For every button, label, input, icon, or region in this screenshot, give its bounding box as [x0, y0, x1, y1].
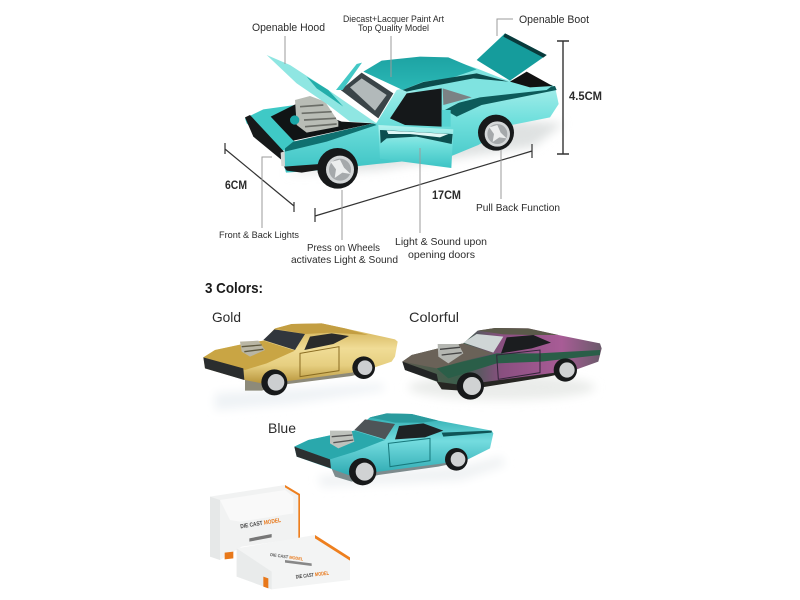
- dark stripe: [442, 431, 492, 437]
- side window: [390, 88, 442, 127]
- green stripe: [437, 350, 600, 378]
- front hood deck: [245, 105, 295, 152]
- hood: [294, 431, 385, 459]
- packaging boxes: [210, 485, 350, 589]
- label: Pull Back Function: Pull Back Function: [476, 202, 560, 214]
- blue car: [294, 413, 505, 487]
- side window: [304, 333, 349, 350]
- label: Press on Wheels: activates Light & Sound: [291, 254, 398, 266]
- door outline: [388, 438, 430, 467]
- side window: [501, 335, 551, 353]
- engine block: [290, 96, 338, 133]
- box side title: DIE CAST MODEL: [270, 552, 304, 562]
- hood: [203, 341, 295, 370]
- label: Diecast and paint: Top Quality Model: [358, 23, 429, 34]
- ground shadow: [408, 375, 595, 400]
- front wheel: [261, 369, 287, 395]
- grille: [294, 447, 331, 468]
- bumper chrome: [281, 151, 285, 167]
- grille: [402, 362, 438, 382]
- engine: [240, 341, 265, 357]
- label: Blue: Blue: [268, 420, 296, 436]
- underbody: [330, 457, 467, 482]
- hood: [402, 343, 493, 368]
- open hood: [267, 55, 377, 123]
- boot lid: [477, 33, 547, 81]
- rear quarter window: [443, 88, 472, 105]
- grille: [203, 357, 244, 380]
- body: [294, 413, 493, 475]
- windshield: [263, 329, 305, 350]
- dimension line: 6CM: [225, 143, 294, 212]
- roof: [370, 413, 438, 423]
- rear dark stripe: [445, 86, 557, 117]
- rear wheel: [478, 115, 514, 151]
- rear wheel: [445, 448, 468, 471]
- rear wheel: [352, 356, 375, 379]
- label: Diecast and paint: Diecast+Lacquer Paint Art: [343, 14, 444, 25]
- ground shadow: [287, 120, 563, 173]
- roof: [478, 328, 558, 335]
- dimension line: 17CM: [315, 144, 532, 222]
- body: [402, 328, 602, 385]
- rear wheel: [554, 358, 577, 382]
- label: 6CM: 6CM: [225, 180, 247, 192]
- box title: DIE CAST MODEL: [296, 571, 330, 581]
- side window: [395, 423, 443, 439]
- trunk opening: [510, 72, 553, 87]
- roof: [363, 57, 477, 90]
- underbody: [245, 367, 372, 391]
- open door: [378, 125, 453, 168]
- roof: [275, 323, 368, 335]
- label: Openable Boot: Openable Boot: [519, 14, 589, 26]
- windshield: [354, 419, 395, 439]
- label: Gold: Gold: [212, 309, 241, 325]
- engine: [330, 431, 354, 448]
- windshield: [341, 73, 393, 118]
- label: Openable Hood: Openable Hood: [252, 22, 325, 34]
- label: Light and Sound upon opening doors: opening doors: [408, 249, 475, 261]
- engine: [438, 344, 463, 363]
- open door glass: [336, 63, 362, 90]
- windshield: [463, 334, 503, 353]
- front wheel: [457, 372, 484, 400]
- roof trim: [403, 73, 508, 92]
- label: 4.5CM: 4.5CM: [569, 91, 602, 103]
- hood chrome edge: [285, 123, 377, 152]
- label: Press on Wheels: Press on Wheels: [307, 242, 380, 254]
- colorful car: [402, 328, 602, 400]
- box title: DIE CAST MODEL: [240, 518, 282, 530]
- underbody: [437, 368, 572, 391]
- reflection: [215, 383, 385, 410]
- label: Colorful: Colorful: [409, 309, 459, 325]
- car body: [281, 75, 559, 173]
- front wheel: [317, 148, 358, 189]
- label: Front and Back Lights: Front & Back Lights: [219, 230, 299, 241]
- door outline: [497, 350, 540, 379]
- label: Light and Sound upon opening doors: Light & Sound upon: [395, 236, 487, 248]
- label: 17CM: 17CM: [432, 190, 461, 202]
- door outline: [300, 347, 339, 377]
- gold car: [203, 323, 398, 410]
- dimension line: 4.5CM: [557, 41, 569, 154]
- door pillar: [442, 110, 451, 127]
- reflection: [318, 457, 505, 487]
- leader lines: [262, 19, 513, 240]
- heading: 3 Colors: 3 Colors:: [205, 280, 263, 297]
- body: [203, 323, 398, 383]
- front grille: [245, 115, 284, 160]
- engine bay: [271, 104, 373, 141]
- main car: blue model with open doors: [245, 33, 563, 189]
- rear deck: [410, 58, 553, 107]
- front box: [237, 535, 350, 589]
- front wheel: [349, 458, 376, 485]
